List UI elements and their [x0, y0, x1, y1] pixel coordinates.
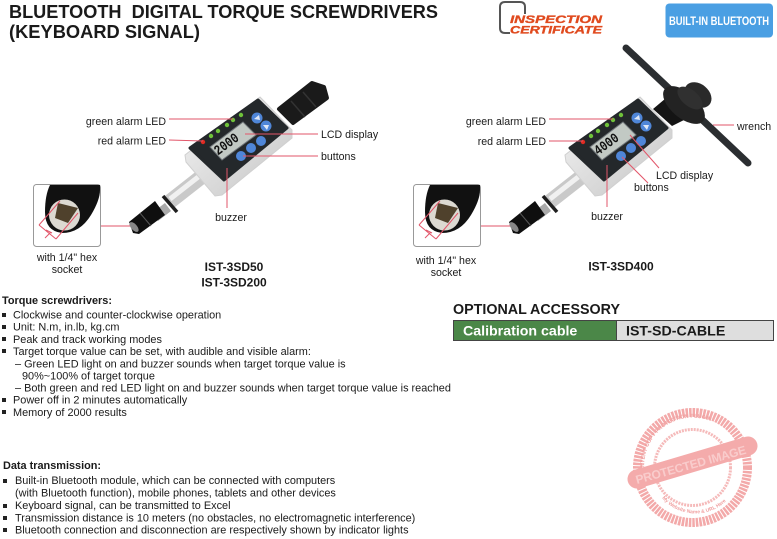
illustration: left torque screwdriver: [128, 83, 327, 234]
callouts: left tool: with 1/4" hex: [36, 252, 98, 264]
leader: left socket: [101, 225, 130, 227]
callouts: right tool: wrench: [736, 121, 771, 133]
model names: left: [201, 260, 267, 290]
shaft: [155, 174, 205, 217]
chuck: [128, 201, 165, 234]
reading: 2000: [212, 131, 243, 160]
badge: inspection certificate: CERTIFICATE: [510, 24, 603, 36]
callouts: left tool: buzzer: [215, 212, 247, 224]
LCD: [210, 122, 256, 160]
text block: torque screwdrivers: – Both green and red LED light on and buzzer sounds when target torque value is reached: [15, 382, 451, 394]
callouts: left tool: green alarm LED: [86, 116, 166, 128]
callouts: left tool: LCD display: [321, 129, 379, 141]
text block: data transmission: [3, 460, 415, 536]
callouts: right tool: with 1/4" hex: [415, 255, 477, 267]
text block: data transmission: Keyboard signal, can be transmitted to Excel: [15, 500, 231, 512]
model names: left: IST-3SD50: [205, 260, 264, 274]
table: optional accessory: [454, 320, 774, 340]
text block: data transmission: Data transmission:: [3, 460, 101, 472]
badge: inspection certificate: [500, 2, 603, 36]
callouts: right tool: buzzer: [591, 211, 623, 223]
text block: torque screwdrivers: Target torque value can be set, with audible and visible alarm:: [13, 346, 311, 358]
callouts: left tool: socket: [52, 264, 82, 276]
chuck: [508, 201, 545, 234]
LEDs: [201, 113, 243, 144]
buttons: [236, 112, 272, 161]
text block: torque screwdrivers: Torque screwdrivers:: [2, 295, 112, 307]
LCD: [590, 122, 636, 160]
callouts: right tool: LCD display: [656, 170, 714, 182]
illustration: right torque screwdriver: [508, 97, 672, 234]
title: BLUETOOTH DIGITAL TORQUE SCREWDRIVERS: [9, 1, 438, 22]
body: [185, 97, 292, 196]
callouts: right tool: red alarm LED: [478, 136, 546, 148]
watermark stamp: My Website Name & URL Here: [662, 496, 726, 514]
LEDs: [581, 113, 623, 144]
callouts: right tool: socket: [431, 267, 461, 279]
text block: torque screwdrivers: [2, 295, 451, 419]
body: [565, 97, 672, 196]
text block: torque screwdrivers: Peak and track working modes: [13, 334, 162, 346]
text block: torque screwdrivers: Unit: N.m, in.lb, kg.cm: [13, 322, 120, 334]
model names: left: IST-3SD200: [201, 276, 267, 290]
face: [570, 100, 667, 180]
text block: data transmission: Transmission distance is 10 meters (no obstacles, no electromagnetic interference): [15, 512, 415, 524]
text block: torque screwdrivers: – Green LED light on and buzzer sounds when target torque value is: [15, 358, 346, 370]
text block: data transmission: Built-in Bluetooth module, which can be connected with computers: [15, 475, 336, 487]
callouts: right tool: green alarm LED: [466, 116, 546, 128]
badge: inspection certificate: INSPECTION: [510, 14, 603, 26]
text block: data transmission: (with Bluetooth function), mobile phones, tablets and other devices: [15, 488, 336, 500]
table: optional accessory: Calibration cable: [463, 324, 577, 340]
text block: torque screwdrivers: Power off in 2 minutes automatically: [13, 394, 188, 406]
buttons: [616, 112, 652, 161]
inset: left hex socket: [34, 184, 100, 246]
callouts: left tool: buttons: [321, 151, 356, 163]
table: optional accessory: IST-SD-CABLE: [626, 324, 725, 340]
shaft: [535, 174, 585, 217]
grip: [279, 83, 327, 123]
callouts: left tool: red alarm LED: [98, 136, 166, 148]
callouts: right tool: buttons: [634, 182, 669, 194]
callouts: right tool: [415, 116, 771, 279]
inset: right hex socket: [414, 184, 480, 246]
text block: data transmission: Bluetooth connection and disconnection are respectively shown by indicator lights: [15, 524, 409, 536]
title: (KEYBOARD SIGNAL): [9, 21, 200, 42]
watermark stamp: WP CONTENT COPY PROTECTION PLUGIN: [640, 414, 712, 468]
watermark stamp: [628, 408, 758, 527]
reading: 4000: [592, 131, 623, 160]
heading: optional accessory: OPTIONAL ACCESSORY: [453, 302, 620, 318]
title: [9, 1, 438, 42]
text block: torque screwdrivers: 90%~100% of target torque: [22, 370, 155, 382]
text block: torque screwdrivers: Memory of 2000 results: [13, 407, 127, 419]
face: [190, 100, 287, 180]
watermark stamp: PROTECTED IMAGE: [634, 443, 748, 487]
model name: right: IST-3SD400: [588, 260, 654, 274]
text block: torque screwdrivers: Clockwise and counter-clockwise operation: [13, 310, 221, 322]
callouts: left tool: [36, 116, 379, 276]
badge: built-in bluetooth: [666, 4, 773, 38]
leader: right socket: [481, 225, 510, 227]
wrench: T-handle of the right tool: [626, 48, 748, 163]
